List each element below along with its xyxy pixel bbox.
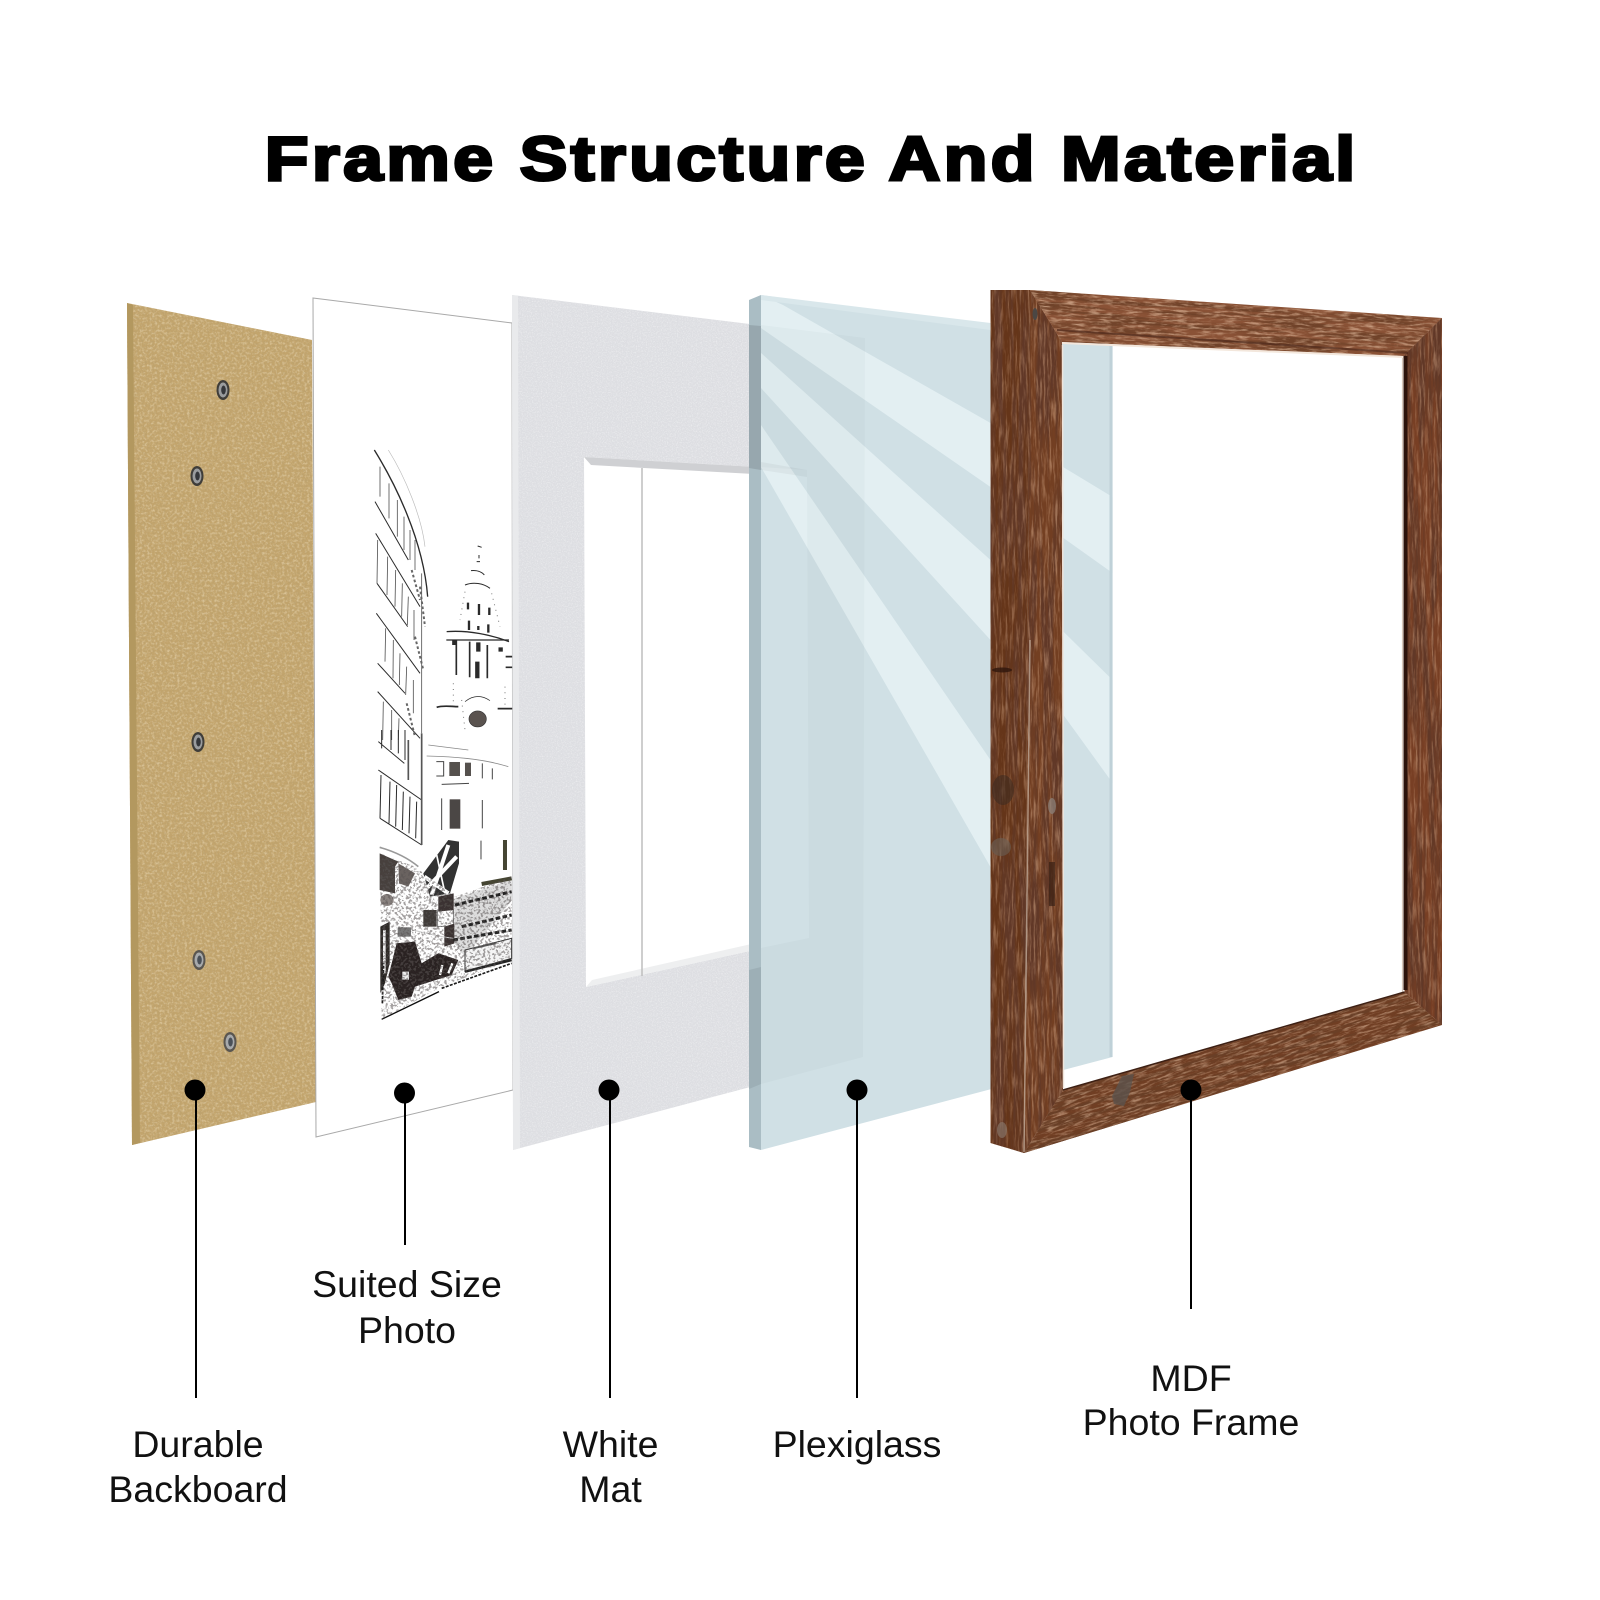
frame left band	[1024, 290, 1063, 1153]
light ray 1	[761, 295, 1113, 573]
light ray 2	[761, 353, 1113, 783]
title: Frame Structure And Material	[265, 125, 1355, 194]
icon: screw 5	[224, 1032, 236, 1052]
callout: plexiglass leader	[846, 1080, 868, 1398]
label: durable backboard	[108, 1423, 288, 1510]
icon: screw 2	[190, 466, 204, 486]
icon: screw 1	[216, 380, 230, 400]
icon: screw 4	[192, 950, 206, 970]
label: white mat	[563, 1423, 658, 1510]
label: suited size photo	[312, 1263, 502, 1351]
photo sketch: curved building and cathedral dome	[374, 450, 512, 740]
label: white mat: Mat	[579, 1468, 642, 1510]
frame inner edges	[1057, 330, 1408, 353]
label: suited size photo: Suited Size	[312, 1263, 502, 1305]
panel: plexiglass	[749, 295, 1113, 1150]
callout: durable backboard leader	[184, 1080, 206, 1398]
glass tint over mat	[761, 325, 865, 1084]
wood knots	[991, 308, 1134, 1138]
label: durable backboard: Durable	[132, 1423, 264, 1465]
label: plexiglass: Plexiglass	[773, 1423, 941, 1465]
mat window bevel	[584, 457, 809, 987]
lower-left shopfront	[380, 847, 418, 867]
label: suited size photo: Photo	[358, 1309, 456, 1351]
panel: MDF photo frame	[962, 245, 1518, 1242]
label: MDF photo frame: Photo Frame	[1083, 1401, 1299, 1443]
glass edge	[749, 295, 761, 1150]
frame side face	[990, 290, 1030, 1153]
panel: white mat	[512, 295, 749, 1150]
label: MDF photo frame: MDF	[1150, 1357, 1232, 1399]
frame bottom band	[1024, 992, 1442, 1153]
callout: photo frame leader	[1180, 1080, 1202, 1309]
panel: durable backboard	[120, 295, 320, 1155]
dome	[465, 546, 490, 588]
frame right band	[1404, 318, 1442, 1025]
label: durable backboard: Backboard	[108, 1468, 288, 1510]
icon: screw 3	[192, 732, 204, 752]
frame top band	[1030, 290, 1442, 356]
label: MDF photo frame	[1083, 1357, 1299, 1443]
callout: white mat leader	[598, 1080, 620, 1398]
label: white mat: White	[563, 1423, 658, 1465]
flag	[423, 840, 459, 897]
callout: suited size photo leader	[394, 1082, 415, 1245]
bus	[454, 880, 512, 957]
crowd	[388, 942, 458, 1000]
panel: suited size photo	[313, 298, 513, 1137]
light ray 3	[761, 425, 990, 867]
photo sketch: street scene, flag and bus	[378, 730, 513, 1022]
